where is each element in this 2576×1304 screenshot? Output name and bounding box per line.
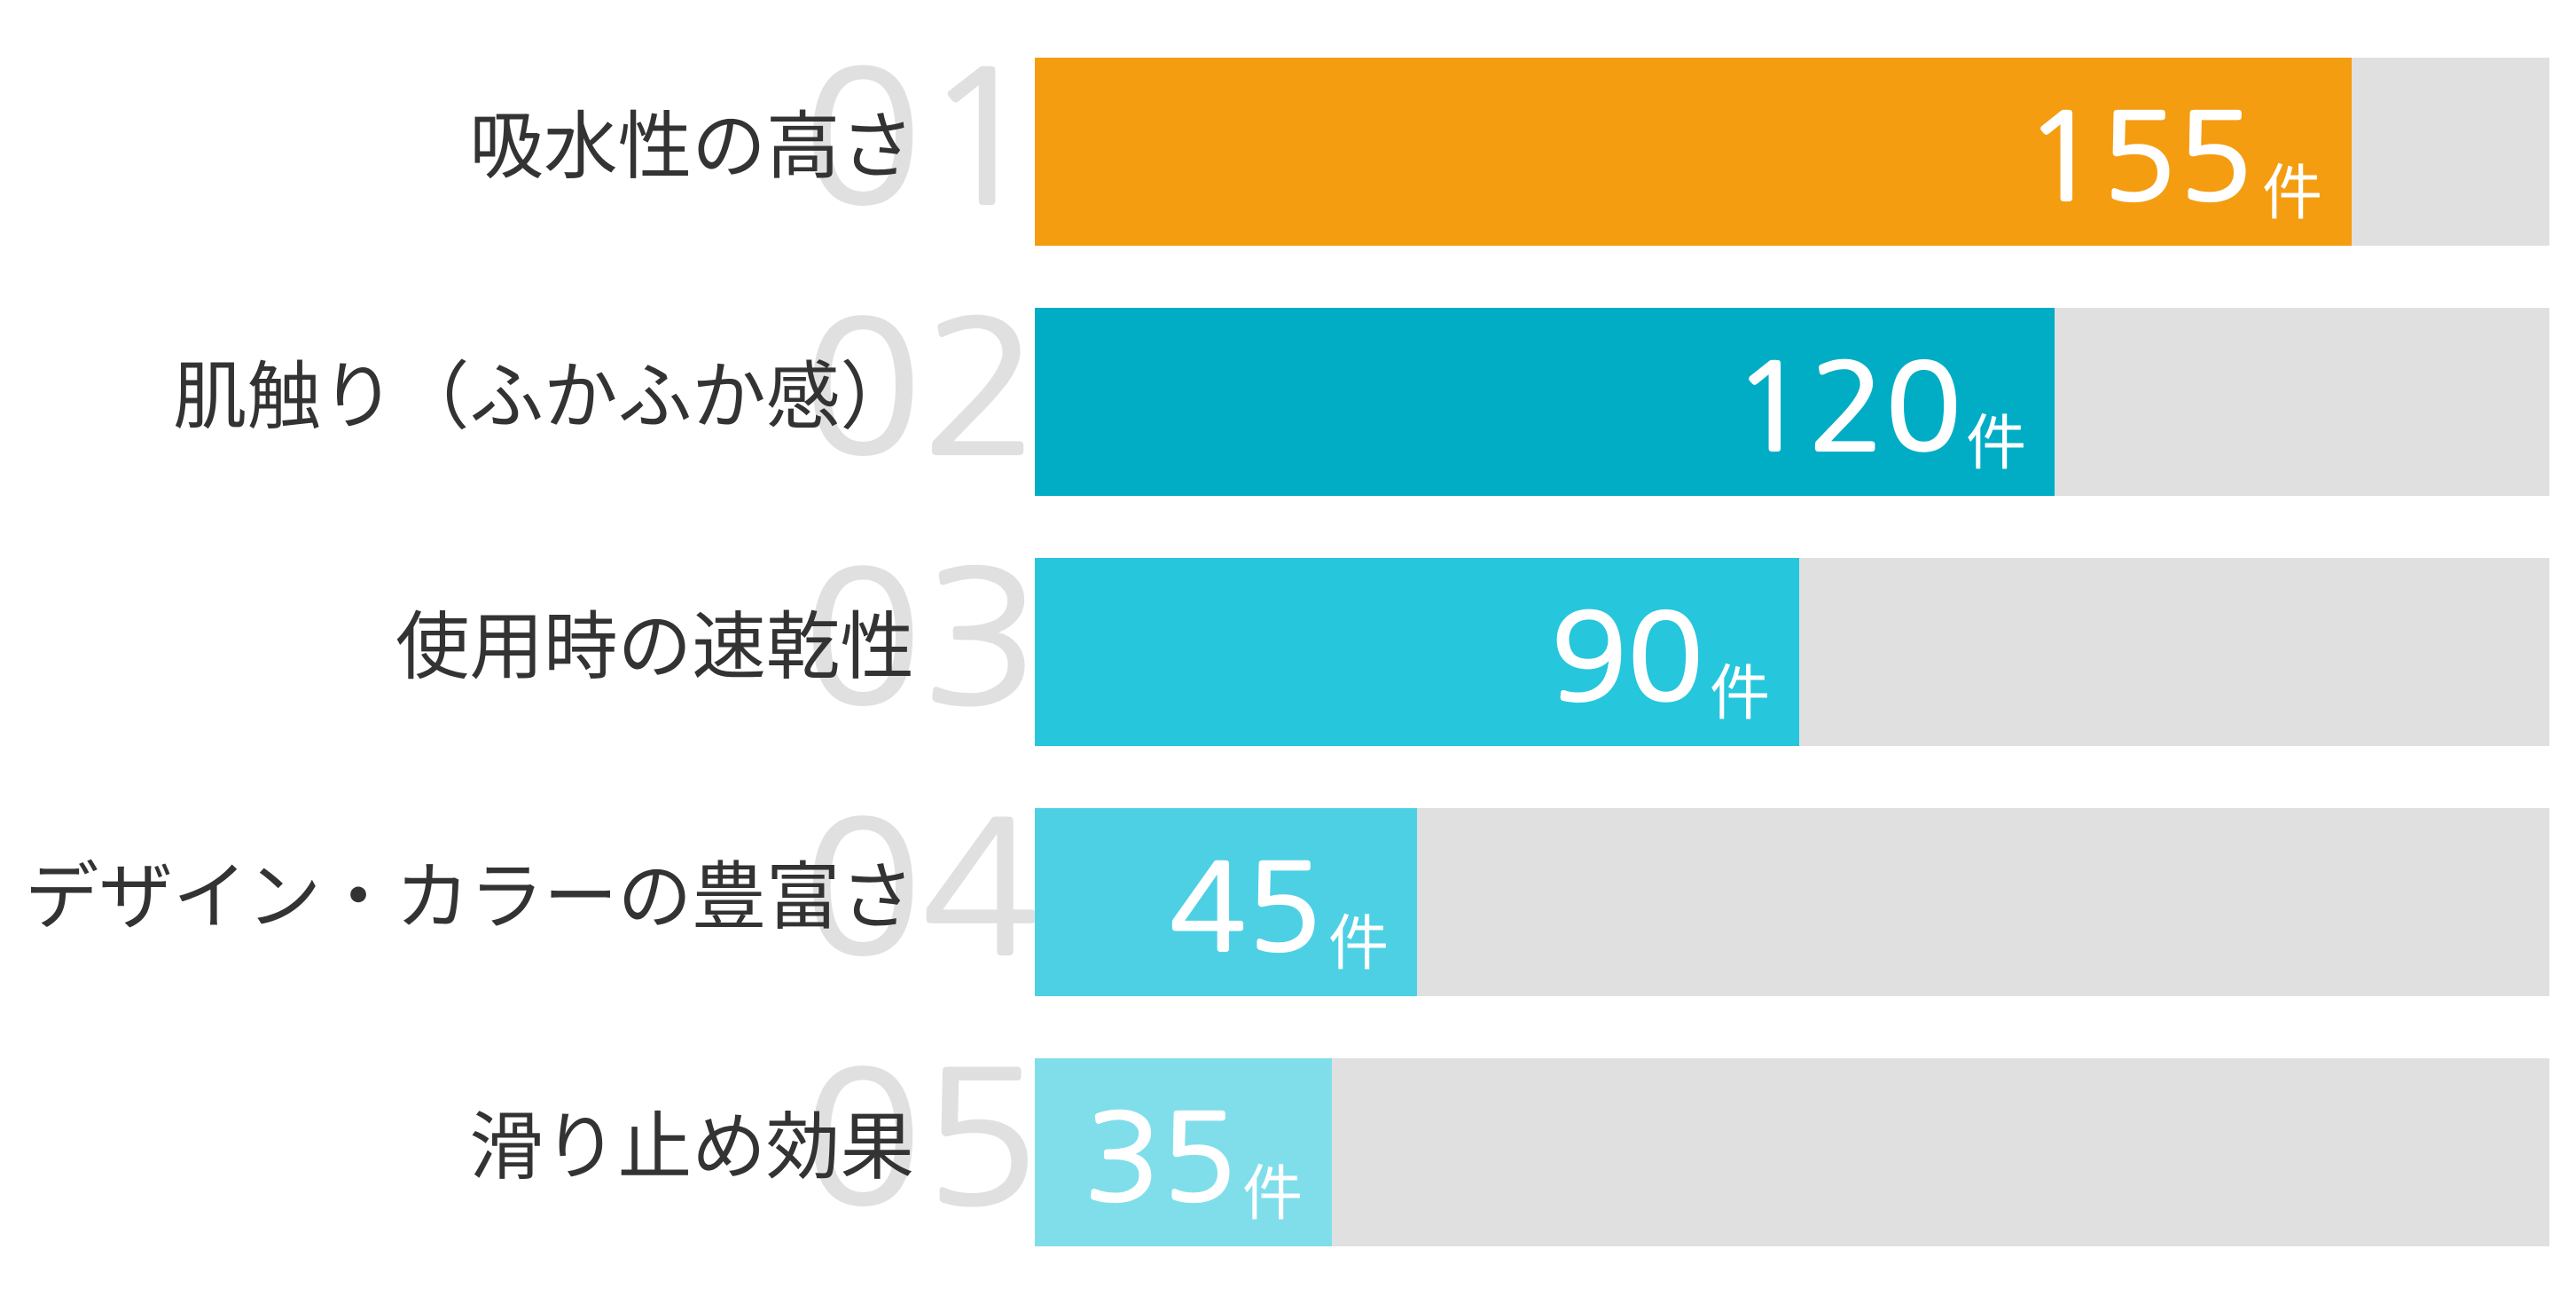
track 4 (1035, 808, 2549, 996)
value 90: 90 (1551, 598, 1703, 717)
unit: 件 (1710, 660, 1770, 727)
bar 5 (1035, 1058, 1332, 1246)
unit: 件 (2262, 160, 2322, 227)
row 5 (469, 1047, 2549, 1246)
unit: 件 (1328, 910, 1389, 978)
bar 3 (1035, 558, 1799, 746)
label: 吸水性の高さ: 吸水性の高さ (469, 105, 914, 188)
row 4 (25, 797, 2549, 996)
row 3 (395, 546, 2549, 746)
track 5 (1035, 1058, 2549, 1246)
label: 使用時の速乾性: 使用時の速乾性 (395, 605, 914, 688)
track 3 (1035, 558, 2549, 746)
rank number 04: 04 (803, 797, 1039, 980)
row 1 (469, 46, 2549, 246)
rank number 03: 03 (803, 546, 1039, 730)
value 155: 155 (2024, 98, 2253, 216)
value 45: 45 (1170, 848, 1322, 967)
label: 滑り止め効果: 滑り止め効果 (469, 1105, 914, 1189)
bar 4 (1035, 808, 1417, 996)
value 35: 35 (1084, 1098, 1237, 1217)
label: デザイン・カラーの豊富さ: デザイン・カラーの豊富さ (25, 855, 914, 939)
track 1 (1035, 58, 2549, 246)
rank number 02: 02 (803, 296, 1039, 480)
track 2 (1035, 308, 2549, 496)
row 2 (173, 296, 2549, 496)
rank number 05: 05 (803, 1047, 1039, 1230)
unit: 件 (1966, 410, 2026, 477)
value 120: 120 (1733, 348, 1961, 467)
label: 肌触り（ふかふか感）: 肌触り（ふかふか感） (173, 355, 914, 438)
bar 2 (1035, 308, 2055, 496)
bar 1 (1035, 58, 2352, 246)
unit: 件 (1242, 1160, 1303, 1228)
rank number 01: 01 (803, 46, 1039, 230)
